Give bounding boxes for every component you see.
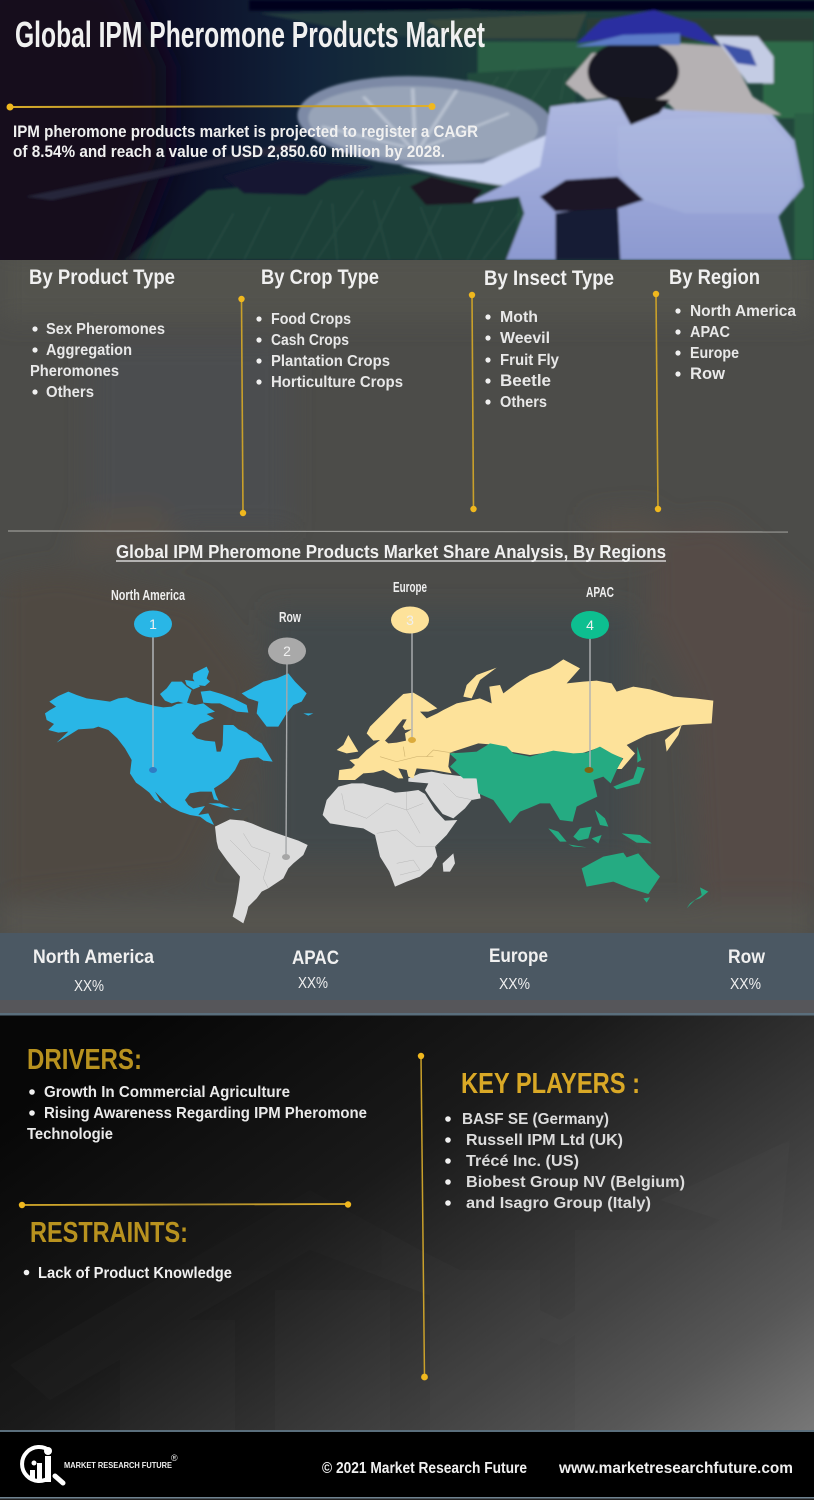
list: insect types: Fruit Fly bbox=[500, 352, 559, 369]
heading: key players: KEY PLAYERS : bbox=[461, 1068, 640, 1100]
divider: crop and insect columns bbox=[469, 292, 477, 512]
list: crop types: Food Crops bbox=[271, 311, 351, 328]
panel: hero photo banner bbox=[0, 0, 814, 280]
icon: company logo bbox=[22, 1447, 63, 1483]
list: crop types: Horticulture Crops bbox=[271, 374, 403, 391]
stat: Row: XX% bbox=[730, 976, 761, 993]
heading: by crop type: By Crop Type bbox=[261, 266, 379, 289]
list: insect types: Others bbox=[500, 394, 547, 411]
stat: North America: XX% bbox=[74, 978, 104, 995]
map pin 4: APAC bbox=[571, 584, 614, 773]
map pin 1: North America: 1 bbox=[149, 616, 157, 632]
list: crop types bbox=[256, 311, 403, 391]
heading: by region: By Region bbox=[669, 266, 760, 289]
stat: North America bbox=[33, 947, 154, 995]
list: drivers: Growth In Commercial Agriculture bbox=[44, 1084, 290, 1101]
map pin 3: Europe: Europe bbox=[393, 579, 427, 596]
panel: regional share strip bbox=[0, 933, 814, 1013]
stat: Row bbox=[728, 947, 765, 993]
list: key players: Trécé Inc. (US) bbox=[466, 1153, 579, 1170]
panel: segmentation and map background bbox=[0, 250, 814, 940]
title: Global IPM Pheromone Products Market bbox=[15, 14, 485, 55]
stat: Row: Row bbox=[728, 947, 765, 968]
map pin 3: Europe: 3 bbox=[406, 612, 414, 628]
list: drivers: Technologie bbox=[27, 1126, 113, 1143]
region: North America bbox=[45, 667, 313, 825]
heading: by insect type: By Insect Type bbox=[484, 267, 614, 290]
panel: region segment bbox=[669, 266, 796, 383]
list: insect types: Beetle bbox=[500, 371, 551, 390]
list: key players: BASF SE (Germany) bbox=[462, 1111, 609, 1128]
list: drivers: Rising Awareness Regarding IPM Pheromone bbox=[44, 1105, 367, 1122]
copyright: © 2021 Market Research Future bbox=[322, 1460, 527, 1477]
list: key players: and Isagro Group (Italy) bbox=[466, 1195, 651, 1212]
stat: Europe bbox=[489, 946, 548, 993]
list: key players: Biobest Group NV (Belgium) bbox=[466, 1174, 685, 1191]
panel: drivers, restraints and key players bbox=[0, 1013, 814, 1430]
logo wordmark: MARKET RESEARCH FUTURE bbox=[64, 1461, 173, 1470]
summary text: of 8.54% and reach a value of USD 2,850.60 million by 2028. bbox=[13, 142, 445, 161]
website: www.marketresearchfuture.com bbox=[558, 1460, 793, 1477]
registered mark: ® bbox=[171, 1453, 178, 1463]
list: regions: Row bbox=[690, 364, 726, 383]
summary text bbox=[13, 122, 478, 161]
list: crop types: Plantation Crops bbox=[271, 353, 390, 370]
stat: APAC bbox=[292, 948, 339, 992]
list: product types: Aggregation bbox=[46, 342, 132, 359]
region: Europe and Russia bbox=[337, 659, 713, 780]
heading: map chart title: Global IPM Pheromone Products Market Share Analysis, By Regions bbox=[116, 542, 666, 562]
gold divider line bbox=[6, 103, 436, 110]
gold divider line bbox=[19, 1201, 351, 1208]
list: crop types: Cash Crops bbox=[271, 332, 349, 349]
map pin 2: Row: Row bbox=[279, 609, 301, 626]
region: Asia Pacific bbox=[449, 743, 708, 908]
list: insect types: Moth bbox=[500, 309, 538, 326]
panel: crop type segment bbox=[256, 266, 403, 391]
list: product types bbox=[30, 321, 165, 401]
divider: product and crop columns bbox=[238, 296, 246, 516]
panel: insect type segment bbox=[484, 267, 614, 411]
list: insect types: Weevil bbox=[500, 330, 550, 347]
panel: footer bbox=[0, 1430, 814, 1500]
stat: North America: North America bbox=[33, 947, 154, 968]
map pin 1: North America bbox=[111, 587, 185, 773]
stat: Europe: Europe bbox=[489, 946, 548, 967]
list: insect types bbox=[485, 309, 559, 411]
map pin 4: APAC: 4 bbox=[586, 617, 594, 633]
map pin 1: North America: North America bbox=[111, 587, 185, 604]
map pin 2: Row: 2 bbox=[283, 643, 291, 659]
map pin 2: Row bbox=[268, 609, 306, 860]
list: regions: Europe bbox=[690, 345, 739, 362]
list: regions: APAC bbox=[690, 324, 730, 341]
list: product types: Sex Pheromones bbox=[46, 321, 165, 338]
stat: Europe: XX% bbox=[499, 976, 530, 993]
divider: insect and region columns bbox=[653, 291, 661, 512]
list: regions bbox=[675, 303, 796, 383]
map pin 3: Europe bbox=[391, 579, 429, 743]
stat: APAC: APAC bbox=[292, 948, 339, 969]
heading: drivers: DRIVERS: bbox=[27, 1044, 142, 1076]
list: product types: Pheromones bbox=[30, 363, 119, 380]
map pin 4: APAC: APAC bbox=[586, 584, 614, 601]
list: drivers bbox=[27, 1084, 367, 1143]
heading: restraints: RESTRAINTS: bbox=[30, 1217, 188, 1249]
gold vertical divider bbox=[418, 1053, 428, 1380]
panel: product type segment bbox=[29, 266, 175, 401]
stat: APAC: XX% bbox=[298, 975, 328, 992]
list: key players: Russell IPM Ltd (UK) bbox=[466, 1132, 623, 1149]
list: key players bbox=[445, 1111, 685, 1212]
list: restraints: Lack of Product Knowledge bbox=[38, 1265, 232, 1282]
world map bbox=[45, 659, 713, 923]
list: regions: North America bbox=[690, 303, 796, 320]
list: product types: Others bbox=[46, 384, 94, 401]
summary text: IPM pheromone products market is projected to register a CAGR bbox=[13, 122, 478, 141]
heading: by product type: By Product Type bbox=[29, 266, 175, 289]
region: Rest of World bbox=[215, 772, 481, 923]
